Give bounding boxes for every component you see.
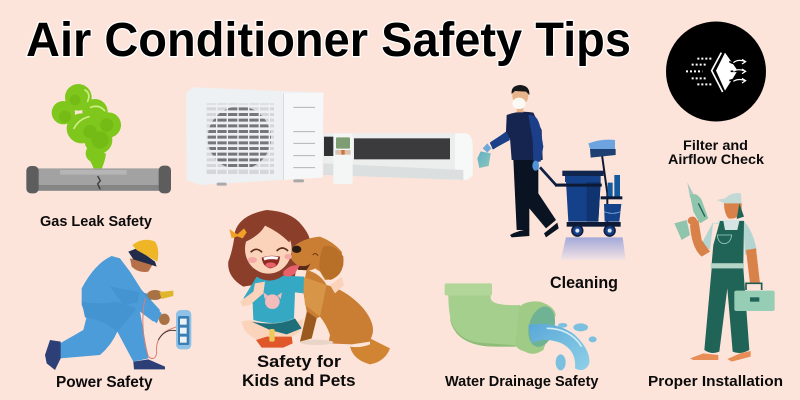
drill — [674, 182, 708, 240]
label: water drainage safety: Water Drainage Safety — [445, 373, 599, 390]
icon: electrician — [45, 240, 191, 370]
label: cleaning: Cleaning — [550, 274, 618, 292]
floor reflection — [561, 237, 626, 260]
label: power safety: Power Safety — [56, 374, 153, 391]
face — [245, 224, 292, 274]
icon: girl with dog — [228, 210, 390, 364]
label: filter and airflow check: Airflow Check — [668, 151, 764, 167]
icon: filter and airflow — [666, 22, 766, 122]
icon: gas leak pipe — [26, 84, 171, 193]
icon: cleaner with cart — [477, 85, 626, 260]
shirt — [243, 276, 304, 323]
arms — [240, 282, 265, 307]
person — [477, 85, 559, 237]
icon: air conditioner units — [186, 87, 473, 186]
label: safety for kids and pets: Safety for — [257, 352, 341, 371]
label: filter and airflow check — [668, 137, 764, 167]
icon: installer with drill and toolbox — [674, 182, 775, 362]
remote control — [333, 133, 353, 184]
title: Air Conditioner Safety Tips — [26, 14, 631, 67]
label: safety for kids and pets — [242, 352, 356, 390]
label: filter and airflow check: Filter and — [683, 137, 748, 153]
indoor unit — [323, 133, 473, 180]
hair — [228, 210, 310, 287]
legs — [242, 320, 287, 343]
dog body — [300, 270, 373, 344]
worker — [688, 193, 760, 362]
label: safety for kids and pets: Kids and Pets — [242, 371, 356, 390]
dog head — [292, 237, 343, 280]
cart — [540, 140, 622, 236]
toolbox — [734, 283, 775, 311]
label: proper installation: Proper Installation — [648, 373, 783, 390]
outdoor unit — [186, 87, 323, 186]
icon: water drain pipe — [445, 283, 597, 370]
label: gas leak safety: Gas Leak Safety — [40, 214, 152, 230]
